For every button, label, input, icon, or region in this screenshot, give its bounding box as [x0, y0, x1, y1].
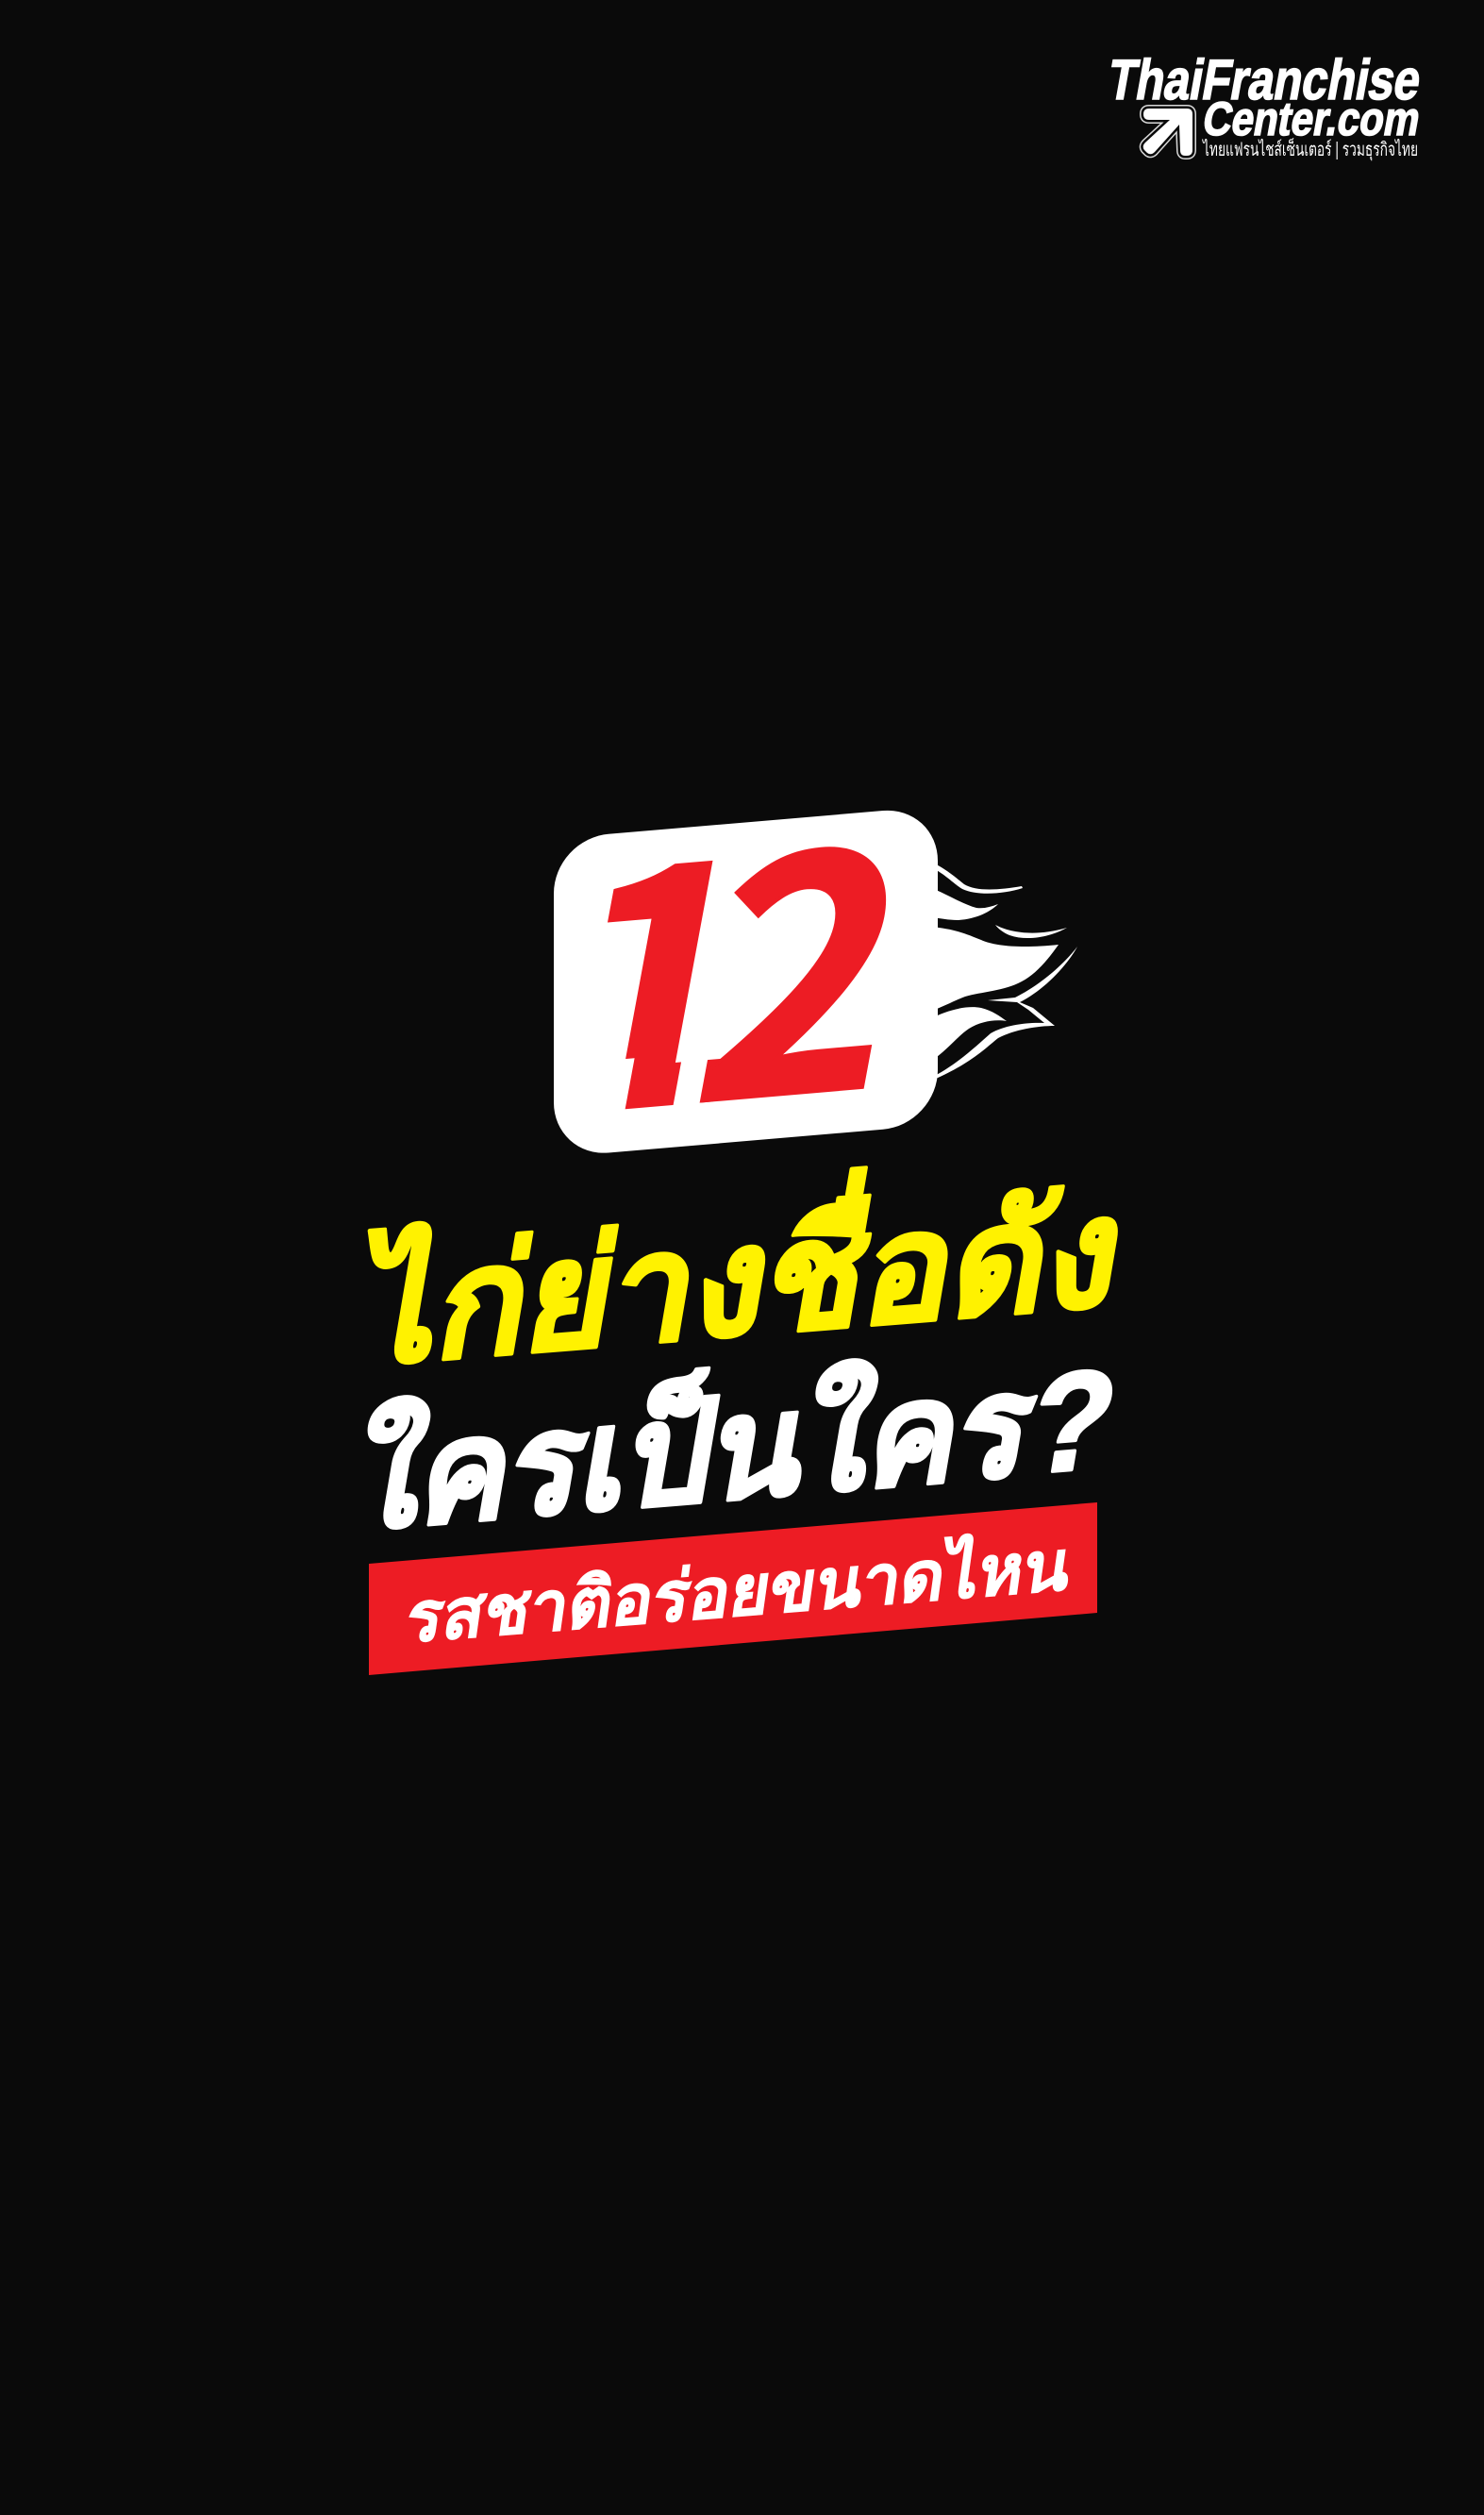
flame: main body	[929, 927, 1059, 1012]
number 12: 12	[523, 710, 948, 1209]
red subtitle banner	[369, 1502, 1097, 1675]
flame: outer wisp	[929, 947, 1077, 1081]
number card	[523, 710, 948, 1209]
flame: top wisp	[929, 861, 1023, 894]
card background	[554, 806, 938, 1157]
flame: upper tongue	[929, 887, 998, 920]
heading line 2: ใครเป็นใคร?	[344, 1333, 1128, 1560]
icon: flames behind number card	[929, 861, 1077, 1081]
logo: ThaiFranchiseCenter	[1104, 47, 1426, 161]
heading line 1: ไก่ย่างชื่อดัง	[341, 1146, 1139, 1398]
flame: crescent	[995, 925, 1067, 938]
banner text: รสชาติอร่อยขนาดไหน	[402, 1524, 1076, 1657]
logo wordmark line 2: Center.com	[1199, 92, 1425, 145]
icon: logo arrow	[1143, 109, 1192, 156]
banner background	[369, 1502, 1097, 1675]
flame: lower tongue	[929, 1007, 1007, 1063]
